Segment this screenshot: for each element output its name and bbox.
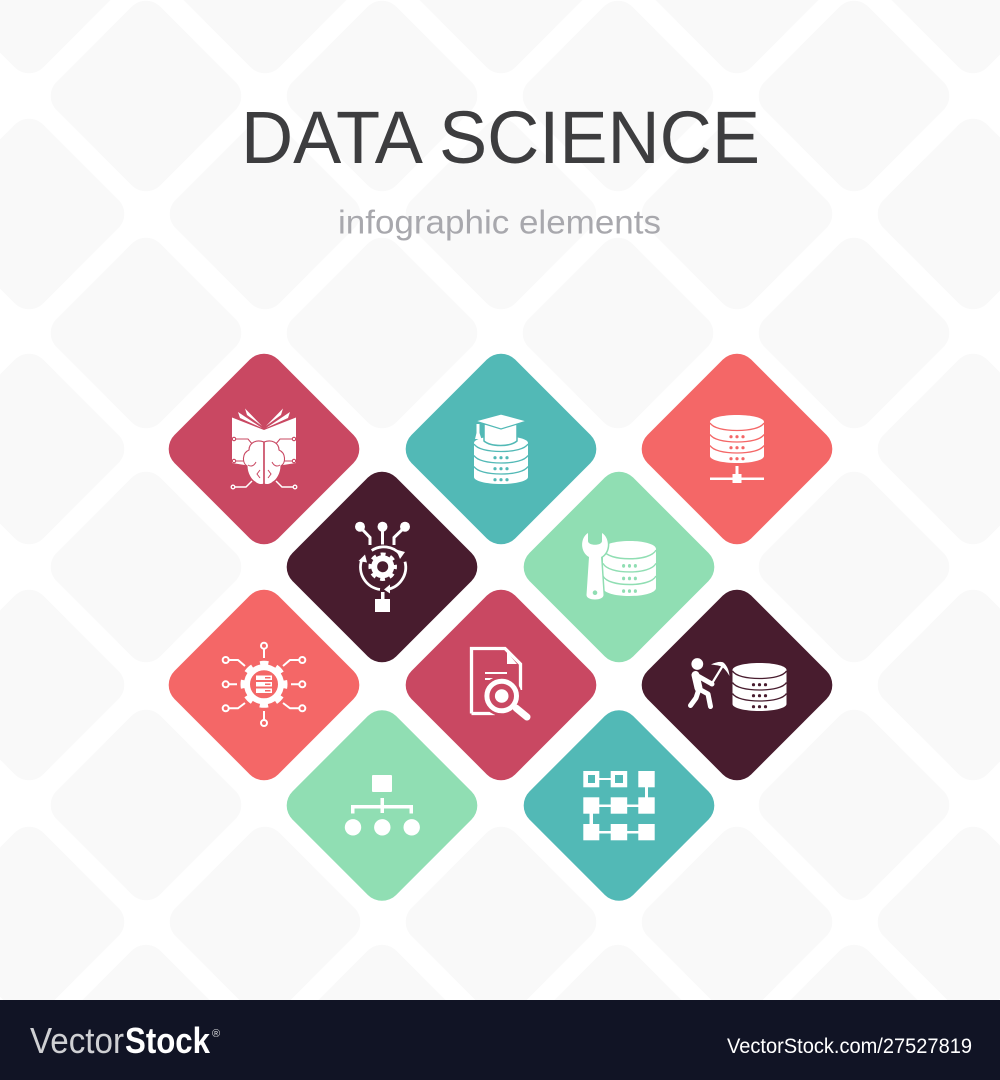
footer logo bbox=[30, 1020, 220, 1061]
panel: data mining bbox=[633, 581, 841, 789]
footer logo: Vector bbox=[30, 1020, 124, 1061]
footer logo: ® bbox=[212, 1028, 220, 1040]
subtitle: infographic elements bbox=[338, 204, 661, 240]
icon: networked database bbox=[710, 415, 764, 483]
panel: database tool bbox=[515, 463, 723, 671]
panel: network database bbox=[633, 345, 841, 553]
title: DATA SCIENCE bbox=[241, 96, 760, 179]
icon: miner and database bbox=[690, 658, 786, 711]
icon: graduation cap on database bbox=[474, 414, 528, 484]
icon: gear with server and connections bbox=[223, 643, 305, 726]
panel: book and brain bbox=[160, 345, 368, 553]
panel: document search bbox=[397, 581, 605, 789]
panel: gear network bbox=[160, 581, 368, 789]
icon: hierarchy tree bbox=[345, 775, 420, 836]
icon: flow blocks diagram bbox=[583, 771, 655, 840]
icon: document with magnifier bbox=[472, 648, 527, 717]
icon: wrench and database bbox=[582, 533, 656, 600]
icon: gear with inputs and output bbox=[355, 522, 410, 612]
footer bar bbox=[0, 1000, 1000, 1080]
footer image id: VectorStock.com/27527819 bbox=[727, 1035, 972, 1058]
panel: graduate database bbox=[397, 345, 605, 553]
panel: hierarchy bbox=[278, 702, 486, 909]
footer logo: Stock bbox=[125, 1020, 211, 1061]
panel: flow blocks bbox=[515, 702, 723, 909]
icon: book with circuit brain bbox=[231, 408, 297, 489]
panel: data process bbox=[278, 463, 486, 671]
